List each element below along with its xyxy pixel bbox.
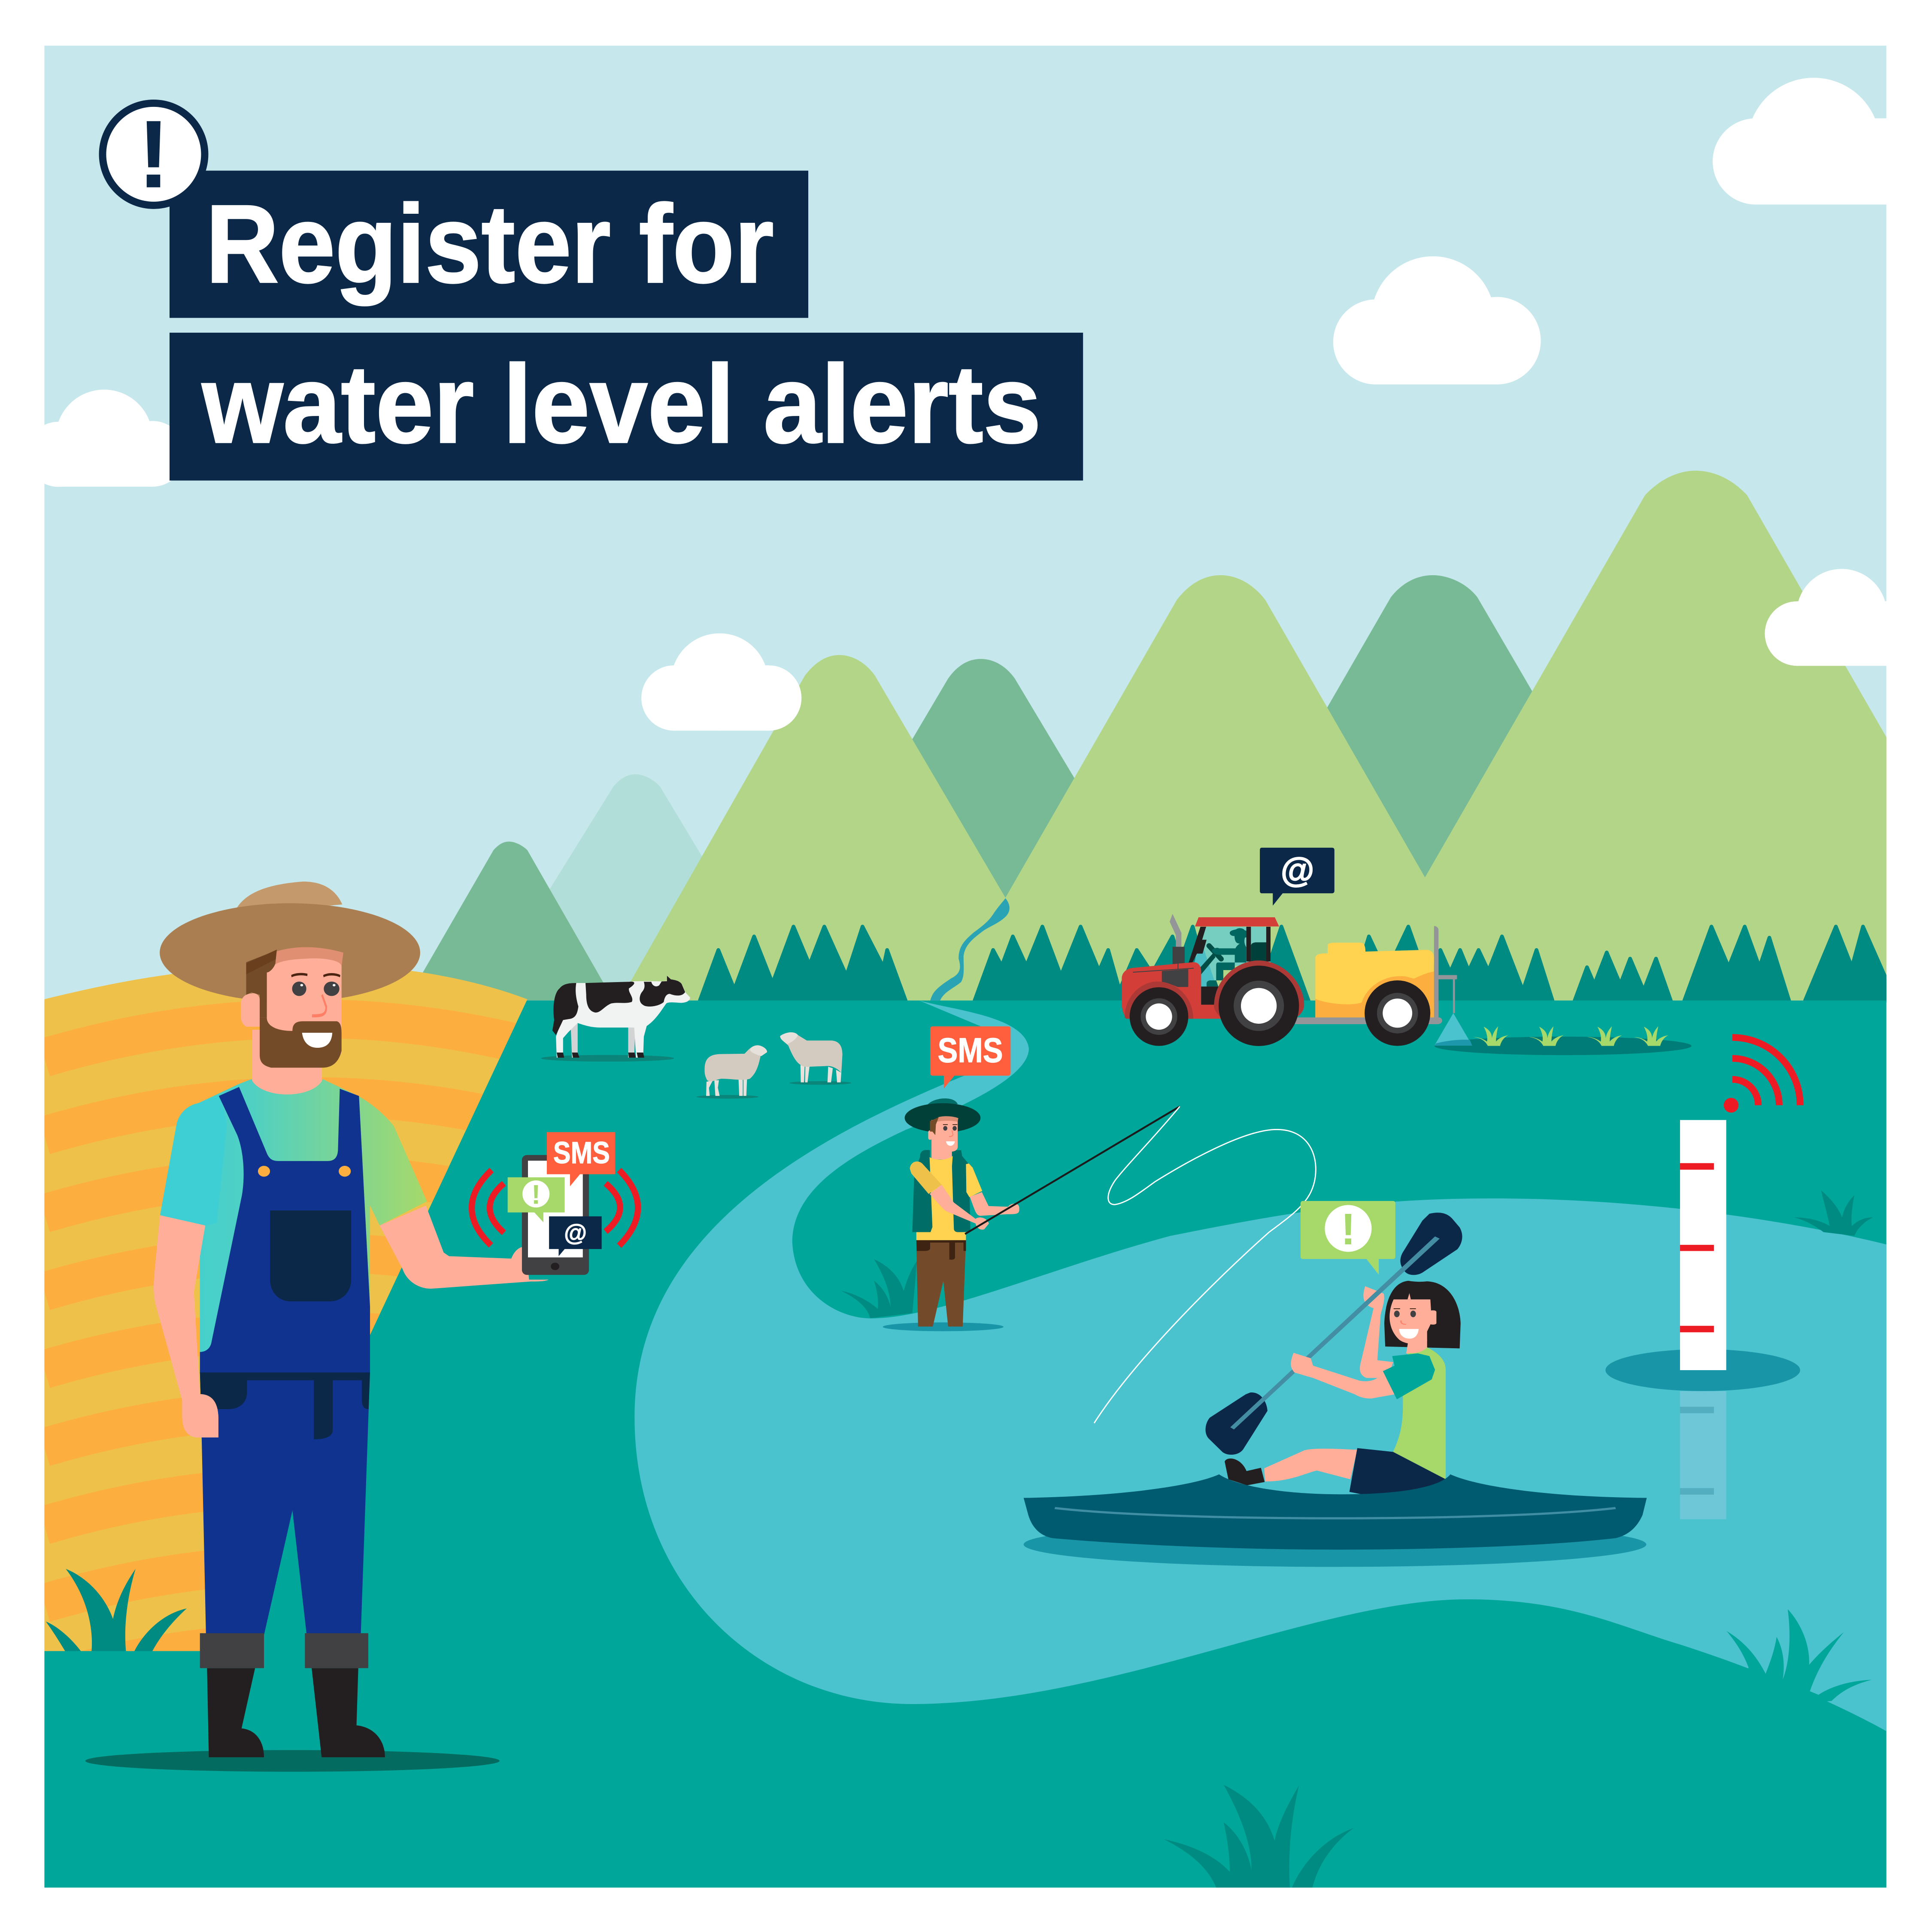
- email bubble: [549, 1216, 602, 1256]
- river and lake: [634, 1001, 1887, 1731]
- vest: [912, 1150, 971, 1232]
- mountain: back pale: [550, 774, 702, 983]
- email bubble: @: [564, 1220, 587, 1246]
- rear fender: [1214, 961, 1304, 1019]
- stream from the mountains: [930, 898, 1010, 1001]
- field base: [44, 955, 537, 1657]
- fisherman: [840, 1098, 1019, 1331]
- fringe parting: [1407, 1293, 1411, 1299]
- cow: [541, 976, 690, 1062]
- phone body: [522, 1155, 589, 1275]
- sleeve: [1383, 1353, 1435, 1399]
- kayak stripe: [1055, 1508, 1616, 1518]
- cab pillars: [1188, 927, 1271, 964]
- beard: [260, 1018, 342, 1068]
- signal waves: [472, 1170, 638, 1246]
- paddle lower blade: [1205, 1392, 1268, 1455]
- water shadow: [883, 1322, 1004, 1331]
- eyes: [943, 1126, 947, 1131]
- gauge pool shadow: [1605, 1349, 1800, 1391]
- brows: [943, 1124, 957, 1125]
- leg: [1264, 1449, 1357, 1481]
- sheep legs: [801, 1065, 841, 1083]
- cab seat: [1251, 942, 1266, 961]
- sprayer boom: [1434, 926, 1457, 1024]
- ear: [241, 993, 260, 1027]
- neck: [252, 1030, 322, 1095]
- tractor hood: [1122, 962, 1222, 1019]
- exhaust: [1170, 914, 1181, 947]
- left sleeve: [160, 1096, 227, 1225]
- field stripes: [44, 1019, 542, 1681]
- title line 2: water level alerts: [200, 342, 1041, 466]
- alert bubble: !: [531, 1180, 540, 1210]
- tractor: [1122, 914, 1304, 1046]
- grass: left of field: [46, 1569, 187, 1651]
- farmer: [85, 882, 549, 1772]
- left sleeve: [910, 1162, 942, 1194]
- head: [931, 1120, 958, 1152]
- cloud: middle: [641, 633, 801, 731]
- crop shadow patch: [1435, 1037, 1692, 1055]
- trousers: [916, 1240, 966, 1327]
- nose: [1401, 1320, 1406, 1324]
- kayak: [1024, 1474, 1647, 1550]
- rear wheel: [1219, 966, 1299, 1046]
- fishing line: [1094, 1107, 1316, 1423]
- alert bubble: [508, 1177, 565, 1222]
- sheep face: [750, 1045, 767, 1056]
- ground: [44, 1001, 1887, 1888]
- waistband and pockets: [200, 1372, 370, 1439]
- cow far legs: [570, 1022, 635, 1058]
- neck: [931, 1148, 952, 1159]
- raised arm: [1360, 1286, 1393, 1378]
- eyes: [292, 982, 306, 996]
- hat crown: [234, 882, 342, 914]
- trees: far right small: [1575, 952, 1671, 1001]
- mountain: dark centre left: [907, 659, 1074, 1001]
- title line 1: Register for: [206, 182, 774, 306]
- right arm: [379, 1206, 549, 1289]
- crop tufts: [1474, 1026, 1668, 1046]
- mouth: [302, 1033, 332, 1048]
- callout: kayaker alert: [1301, 1201, 1395, 1275]
- driver: [1207, 928, 1247, 986]
- shirt: [160, 1079, 427, 1355]
- kayaker: [1024, 1213, 1647, 1567]
- front wheel: [1130, 987, 1188, 1046]
- grass: bottom centre: [1164, 1785, 1354, 1888]
- grass: bottom right: [1725, 1609, 1871, 1707]
- gauge reflection: [1680, 1391, 1726, 1519]
- SMS bubble: [547, 1132, 615, 1186]
- grass: by gauge: [1794, 1190, 1873, 1236]
- cow patches: [552, 976, 685, 1058]
- phone screen: [528, 1161, 583, 1257]
- shorts: [1350, 1448, 1446, 1494]
- mouth: [1399, 1329, 1419, 1339]
- kayak shadow: [1024, 1522, 1646, 1567]
- gauge post: [1680, 1120, 1726, 1370]
- overalls bib: [200, 1087, 370, 1373]
- lower arm: [1291, 1353, 1395, 1398]
- trousers: [200, 1370, 370, 1635]
- arms: [970, 1192, 1019, 1216]
- brows: [291, 974, 340, 976]
- right sleeve: [966, 1164, 982, 1197]
- tank shade: [1315, 971, 1434, 1017]
- mountains: [406, 471, 1932, 1001]
- cloud: left: [26, 390, 185, 487]
- fishing rod: [965, 1107, 1180, 1234]
- sheep shadow: [697, 1095, 758, 1098]
- animals: [541, 976, 851, 1098]
- home button: [551, 1263, 559, 1270]
- shoe: [1225, 1459, 1265, 1485]
- SMS bubble: SMS: [553, 1136, 610, 1170]
- boot cuffs: [200, 1633, 368, 1668]
- belt and pockets: [916, 1240, 966, 1260]
- sprayer wheel: [1365, 980, 1430, 1046]
- sheep: right: [780, 1032, 851, 1085]
- boots: [207, 1668, 385, 1757]
- mountain: light green centre: [1005, 575, 1425, 1001]
- mountain: small dark: [423, 841, 604, 1001]
- sheep: left: [697, 1045, 767, 1098]
- mountain: dark centre right: [1310, 575, 1683, 1001]
- callout: tractor email: @: [1280, 851, 1314, 889]
- chassis: [1201, 986, 1220, 1005]
- sheep shadow: [789, 1081, 851, 1085]
- phone with alerts: [472, 1132, 638, 1275]
- front fender: [1125, 982, 1193, 1019]
- steering wheel: [1201, 946, 1221, 974]
- paddle upper blade: [1400, 1213, 1462, 1275]
- neck: [1406, 1340, 1427, 1354]
- forehead shade: [275, 947, 343, 967]
- callout: fisherman SMS: SMS: [937, 1031, 1003, 1070]
- nose: [949, 1131, 953, 1137]
- cab window: [1195, 927, 1271, 986]
- forehead shade: [936, 1116, 958, 1122]
- nose: [312, 995, 326, 1016]
- cloud: right: [1765, 569, 1898, 666]
- tow bar: [1295, 1017, 1442, 1024]
- mouth: [946, 1141, 955, 1146]
- trees: centre range: [975, 927, 1122, 1001]
- ground shadow: [85, 1750, 500, 1772]
- wifi dot: [1724, 1098, 1738, 1113]
- mountain: light green left: [631, 655, 1005, 1001]
- hat brim: [160, 903, 420, 1002]
- hat crown: [926, 1098, 958, 1107]
- mountain: light green right: [1425, 470, 1887, 1001]
- engine grille: [1162, 969, 1188, 987]
- title line 2 background: [170, 333, 1083, 481]
- trees: behind tractor: [1115, 927, 1309, 1001]
- face: [1389, 1299, 1432, 1344]
- water gauge: [1605, 1037, 1800, 1519]
- trees: far right tall: [1684, 927, 1789, 1001]
- gauge ticks: [1680, 1163, 1714, 1332]
- callout: fisherman SMS: [930, 1026, 1010, 1089]
- title line 1 background: [170, 171, 808, 318]
- icon: alert circle: !: [138, 100, 170, 208]
- forest: tree lines: [700, 927, 1887, 1001]
- cow body: [556, 976, 690, 1058]
- trees: right of tractor: [1349, 927, 1553, 1001]
- cloud: top right: [1713, 78, 1898, 205]
- trees: left range: [700, 927, 906, 1001]
- callout: kayaker alert: !: [1341, 1204, 1356, 1254]
- window reflection: [1194, 949, 1215, 986]
- face: [267, 955, 342, 1054]
- callout: tractor email: [1260, 848, 1335, 906]
- buttons: [258, 1166, 270, 1177]
- cab roof: [1195, 917, 1279, 926]
- grass behind fisherman: [840, 1259, 917, 1318]
- hood trim: [1133, 964, 1194, 972]
- sheep face: [780, 1032, 798, 1044]
- left arm: [154, 1215, 218, 1438]
- eyes: [1394, 1310, 1400, 1317]
- sheep body: [704, 1045, 767, 1081]
- hair: [246, 950, 277, 1018]
- cow shadow: [541, 1055, 674, 1062]
- trees: right edge: [1805, 927, 1887, 1001]
- sprayer trailer: [1295, 926, 1692, 1055]
- top: [1393, 1347, 1446, 1479]
- bib pocket: [270, 1210, 351, 1301]
- hair: [930, 1117, 939, 1135]
- tee shirt: [916, 1156, 966, 1240]
- hat brim: [905, 1103, 980, 1132]
- title block: [99, 100, 1083, 481]
- wheat field: [44, 955, 542, 1681]
- muffler: [1173, 947, 1185, 964]
- paddle shaft: [1230, 1237, 1440, 1429]
- reflection ticks: [1680, 1407, 1714, 1495]
- hair back: [1384, 1281, 1461, 1348]
- wifi signal: [1732, 1037, 1800, 1105]
- sprayer tank: [1315, 943, 1434, 1017]
- sheep legs: [706, 1079, 747, 1096]
- cloud: centre: [1333, 256, 1541, 385]
- icon: alert circle: [99, 100, 208, 209]
- sheep body: [780, 1032, 843, 1073]
- brows: [1394, 1308, 1416, 1309]
- spray cone: [1435, 1013, 1472, 1046]
